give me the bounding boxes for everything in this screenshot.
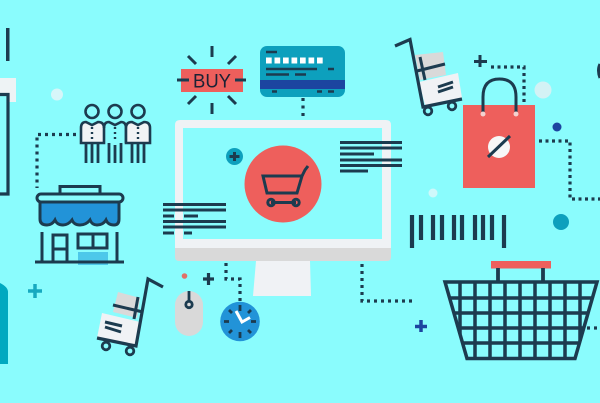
text lines: right of monitor: [340, 142, 402, 171]
icon: hand truck lower left: [97, 279, 163, 355]
icon: BUY sign with rays: [177, 46, 246, 114]
icon: credit card: [260, 46, 345, 97]
decorative dot: pale right: [534, 82, 552, 98]
dotted connector: bag to right: [539, 141, 600, 199]
icon: three staff people: [81, 105, 150, 163]
dotted connector: plus to bag: [491, 67, 524, 103]
icon: clock: [220, 302, 260, 341]
icon: shop storefront: [35, 186, 124, 265]
plus: dark lower: [203, 273, 214, 285]
dotted connector: people to shop: [37, 134, 76, 188]
icon: red shopping bag: [463, 79, 535, 188]
dotted connector: basket right: [587, 326, 600, 330]
icon: computer mouse: [175, 291, 203, 336]
monitor base: [175, 248, 391, 261]
decorative dot: navy: [552, 122, 562, 132]
barcode: [412, 215, 504, 248]
left cropped tag: [0, 283, 8, 364]
icon: BUY sign with rays: BUY: [193, 72, 231, 92]
plus: blue: [415, 320, 427, 332]
monitor frame: [175, 120, 391, 248]
red circle with shopping cart: [244, 146, 322, 222]
decorative dot: left pale: [51, 88, 63, 100]
plus: teal left: [28, 284, 42, 298]
decorative dot: small pale: [428, 188, 438, 198]
left cropped device: [0, 28, 16, 194]
decorative dot: teal: [553, 214, 569, 230]
plus badge: [226, 148, 243, 165]
decorative dot: red: [182, 273, 187, 279]
plus: top right: [474, 55, 487, 67]
dotted connector: card to monitor: [301, 98, 305, 120]
right cropped icon: [598, 64, 600, 78]
text lines: left of monitor: [163, 204, 226, 233]
icon: hand truck upper right: [395, 40, 462, 115]
monitor stand: [253, 261, 311, 296]
dotted connector: monitor to clock: [226, 263, 240, 301]
dotted connector: monitor to basket: [362, 264, 414, 301]
icon: shopping basket: [445, 261, 597, 358]
monitor: [175, 120, 391, 296]
